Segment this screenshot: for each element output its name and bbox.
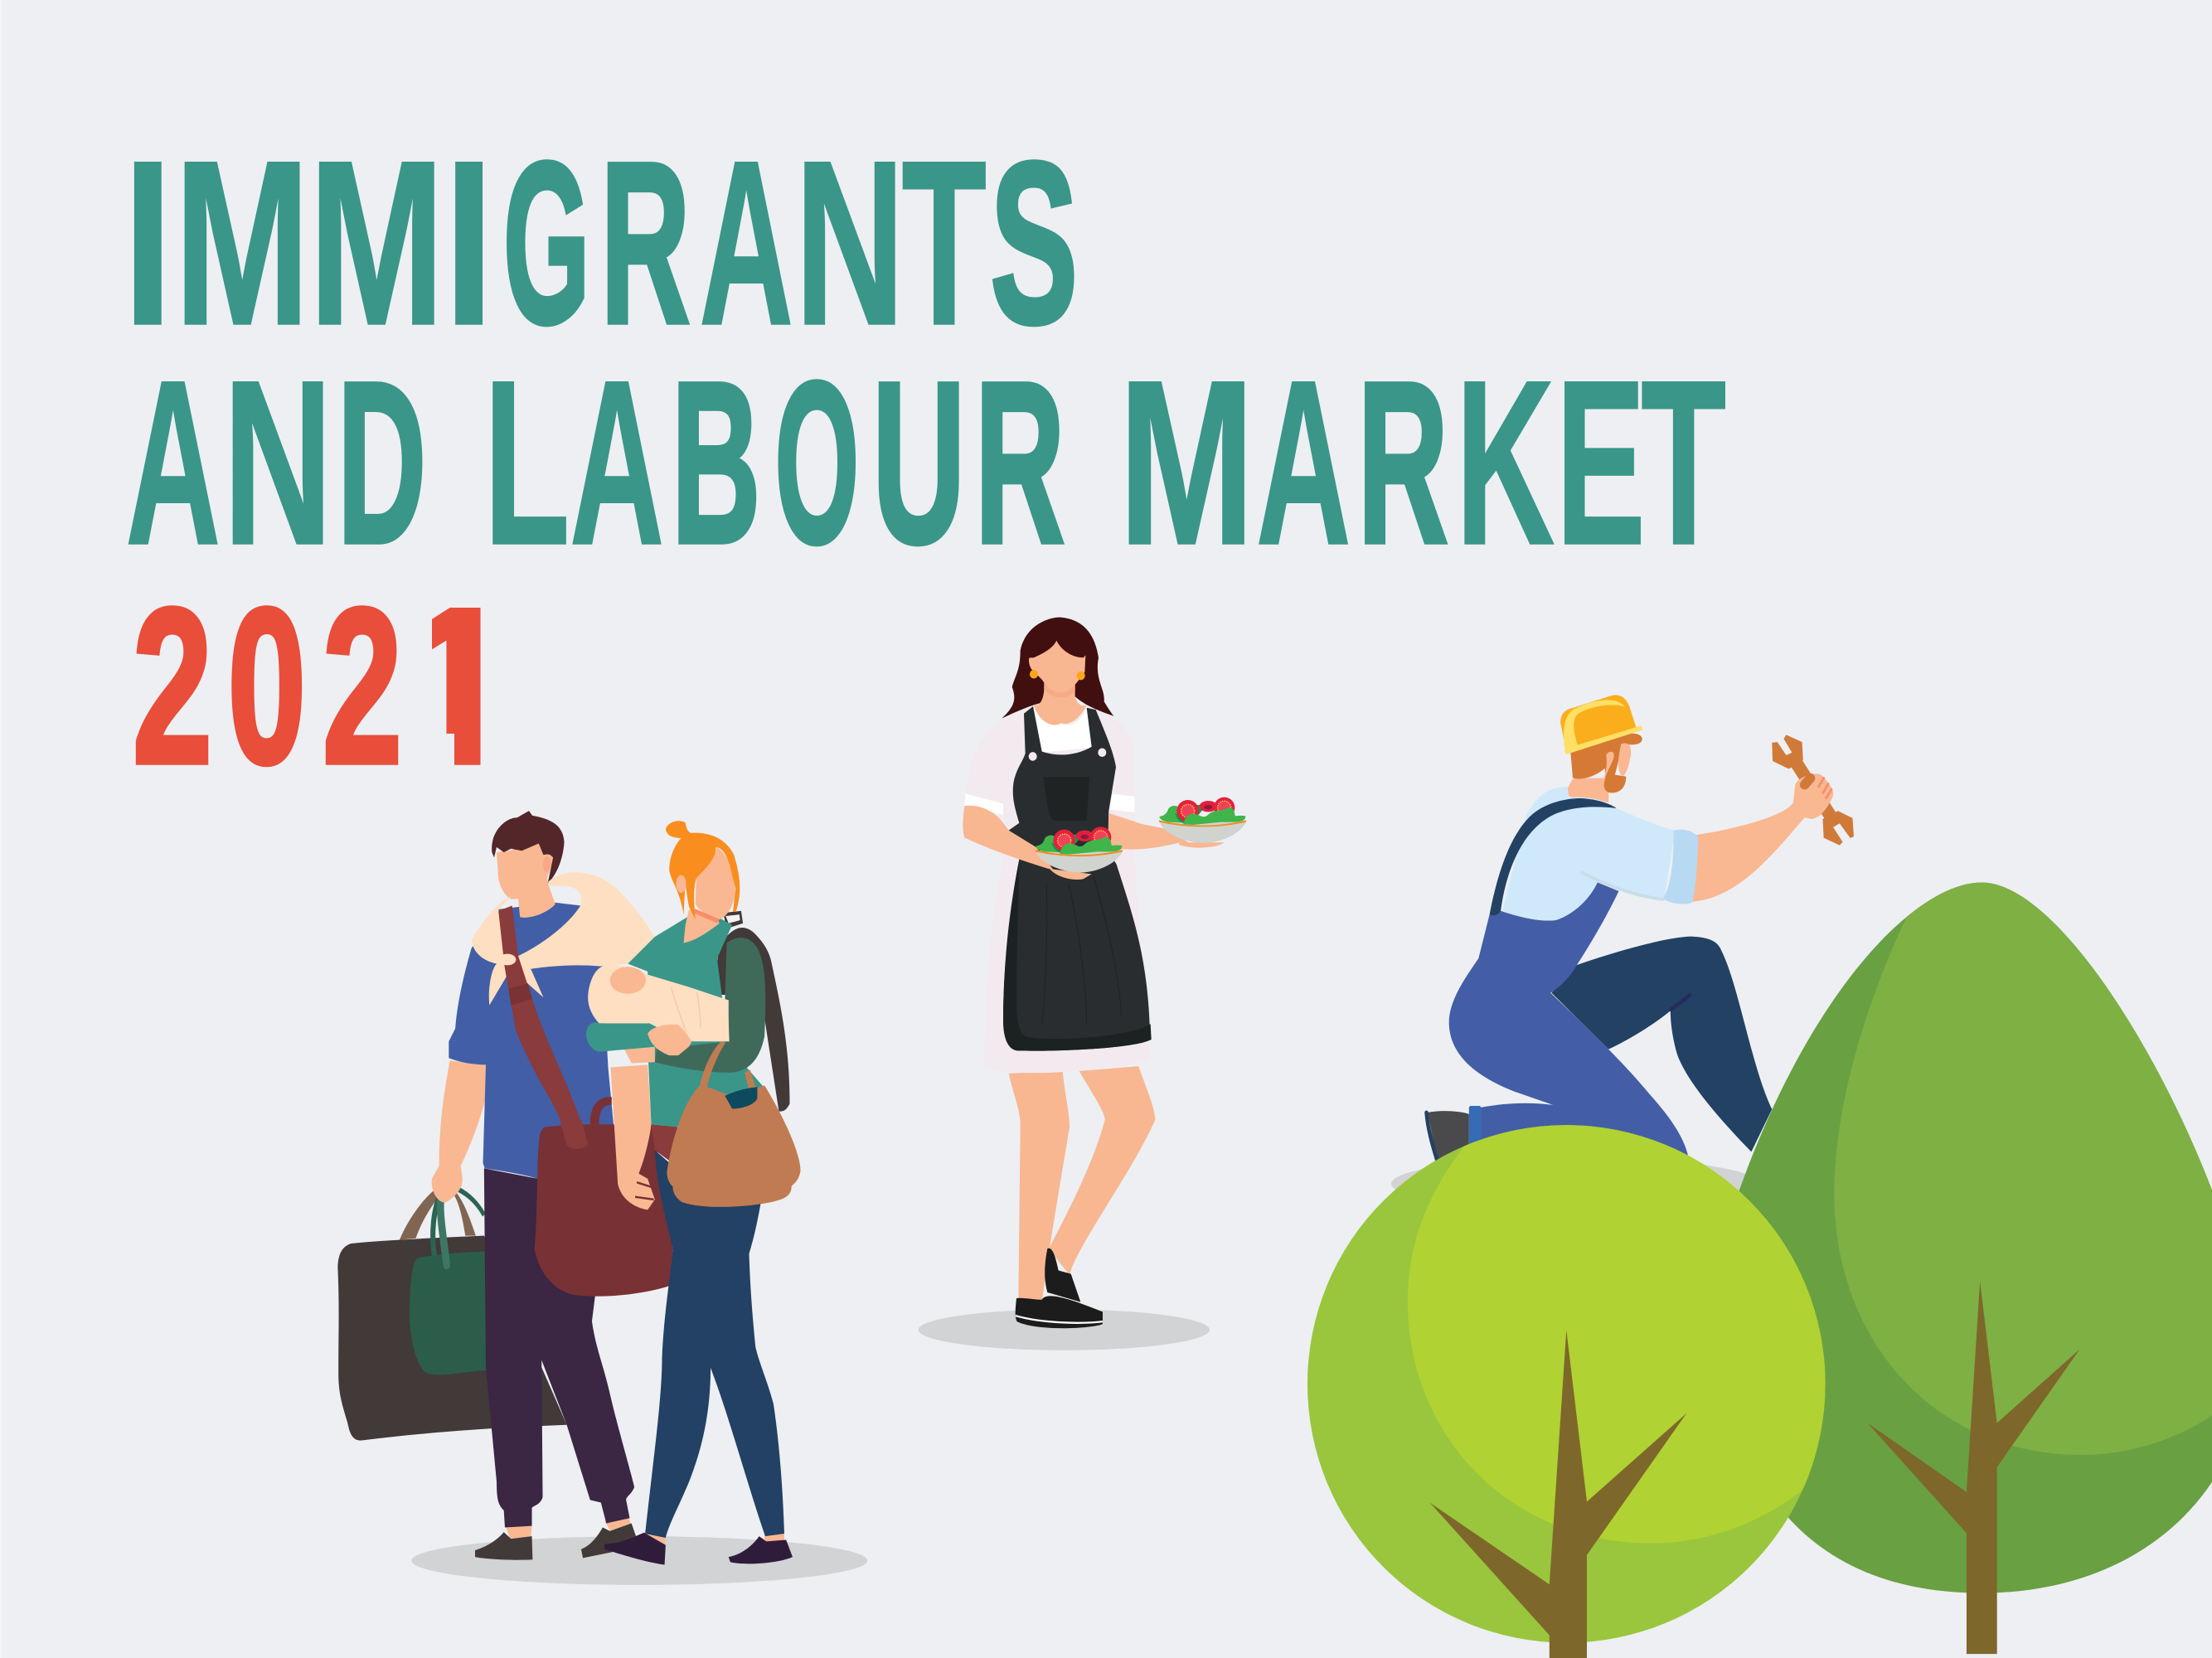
man forearm and hand	[611, 1064, 655, 1210]
title line 1: G	[503, 114, 590, 371]
salad plate side	[1159, 797, 1246, 848]
right arm	[1105, 813, 1225, 850]
head and hair	[1002, 618, 1113, 725]
sleeve fold line	[1582, 873, 1662, 899]
apron	[1003, 706, 1152, 1051]
title line 2: M	[1118, 332, 1254, 594]
title line 2: N	[223, 332, 332, 594]
tan handbag	[667, 1041, 800, 1207]
sleeve cuff	[1662, 830, 1698, 904]
head with beard	[1570, 734, 1642, 793]
woman	[604, 821, 793, 1565]
woman torso	[628, 916, 764, 1127]
back tree	[1720, 862, 2212, 1654]
worker ground shadow	[1391, 1157, 1759, 1210]
shoulder strap	[498, 905, 589, 1149]
wrench	[1772, 734, 1854, 846]
sleeve cuffs	[964, 794, 1134, 815]
title line 1: T	[901, 112, 987, 374]
woman orange hair	[666, 821, 740, 919]
title year: 2	[323, 562, 402, 810]
overall strap	[1490, 798, 1617, 915]
dress	[964, 706, 1150, 1073]
overall cuff	[1469, 1106, 1481, 1147]
illustration: kneeling repair worker with wrench	[1427, 695, 1854, 1194]
title year: 2	[133, 562, 212, 810]
illustration: trees	[1307, 862, 2212, 1658]
woman trousers	[645, 1151, 784, 1538]
woman teal sleeve	[586, 1022, 657, 1052]
ground shadow	[919, 1309, 1210, 1350]
back leg	[1551, 937, 1772, 1151]
shoes	[1016, 1248, 1103, 1328]
title year: 1	[397, 562, 521, 810]
woman green sleeve	[655, 938, 765, 1073]
illustration: migrant family with bags and baby	[337, 811, 867, 1585]
title	[128, 159, 1725, 768]
woman neck and face	[684, 847, 735, 943]
title line 1: I	[444, 112, 494, 374]
title line 2: L	[484, 332, 570, 594]
front tree	[1307, 1125, 1826, 1658]
ground shadow	[411, 1536, 867, 1585]
salad plates	[1036, 797, 1246, 873]
title line 2: U	[872, 334, 965, 591]
title line 1: R	[600, 114, 690, 371]
title line 1: M	[174, 112, 310, 374]
title line 2: A	[126, 332, 221, 594]
title line 2: O	[775, 334, 859, 591]
baby sling	[472, 872, 655, 1005]
collar	[1034, 705, 1092, 753]
title line 2: R	[975, 334, 1065, 591]
backpack	[648, 911, 789, 1112]
title line 2: T	[1641, 332, 1726, 594]
maroon shoulder bag	[535, 1097, 673, 1297]
boot	[1427, 1111, 1469, 1161]
left arm	[963, 806, 1092, 880]
green bag	[410, 1186, 488, 1374]
title line 2: K	[1456, 332, 1555, 594]
strap end	[560, 1119, 589, 1149]
title line 2: D	[337, 334, 426, 591]
title line 1: A	[699, 112, 793, 374]
title year: 0	[227, 562, 306, 810]
woman hand	[648, 1025, 692, 1055]
man trousers	[484, 1168, 634, 1527]
legs	[1009, 1066, 1155, 1302]
woman shoes	[604, 1533, 793, 1565]
hard hat	[1560, 695, 1642, 754]
title line 2: A	[1256, 332, 1351, 594]
title line 1: N	[795, 112, 905, 374]
dark holdall bag	[337, 1186, 567, 1441]
swaddled baby	[588, 965, 730, 1041]
illustration: waitress serving salads	[919, 618, 1225, 1350]
title line 2: A	[570, 332, 664, 594]
belt	[652, 1124, 678, 1161]
shirt	[1502, 787, 1676, 921]
title line 1: I	[123, 112, 173, 374]
title line 1: S	[990, 114, 1078, 371]
man shoes	[475, 1515, 637, 1560]
salad plate front	[1036, 827, 1123, 873]
man hand under baby	[624, 1046, 655, 1063]
man shirt	[449, 903, 614, 1179]
title line 1: M	[308, 112, 444, 374]
arm and hand	[1693, 773, 1833, 902]
overalls	[1449, 882, 1688, 1194]
man head	[492, 811, 565, 918]
title line 2: R	[1358, 334, 1448, 591]
man	[432, 811, 637, 1560]
title line 2: E	[1556, 332, 1646, 594]
title line 2: B	[672, 334, 760, 591]
man arm holding bags	[432, 1060, 488, 1202]
neck	[1564, 778, 1608, 802]
sling knot	[499, 954, 516, 965]
